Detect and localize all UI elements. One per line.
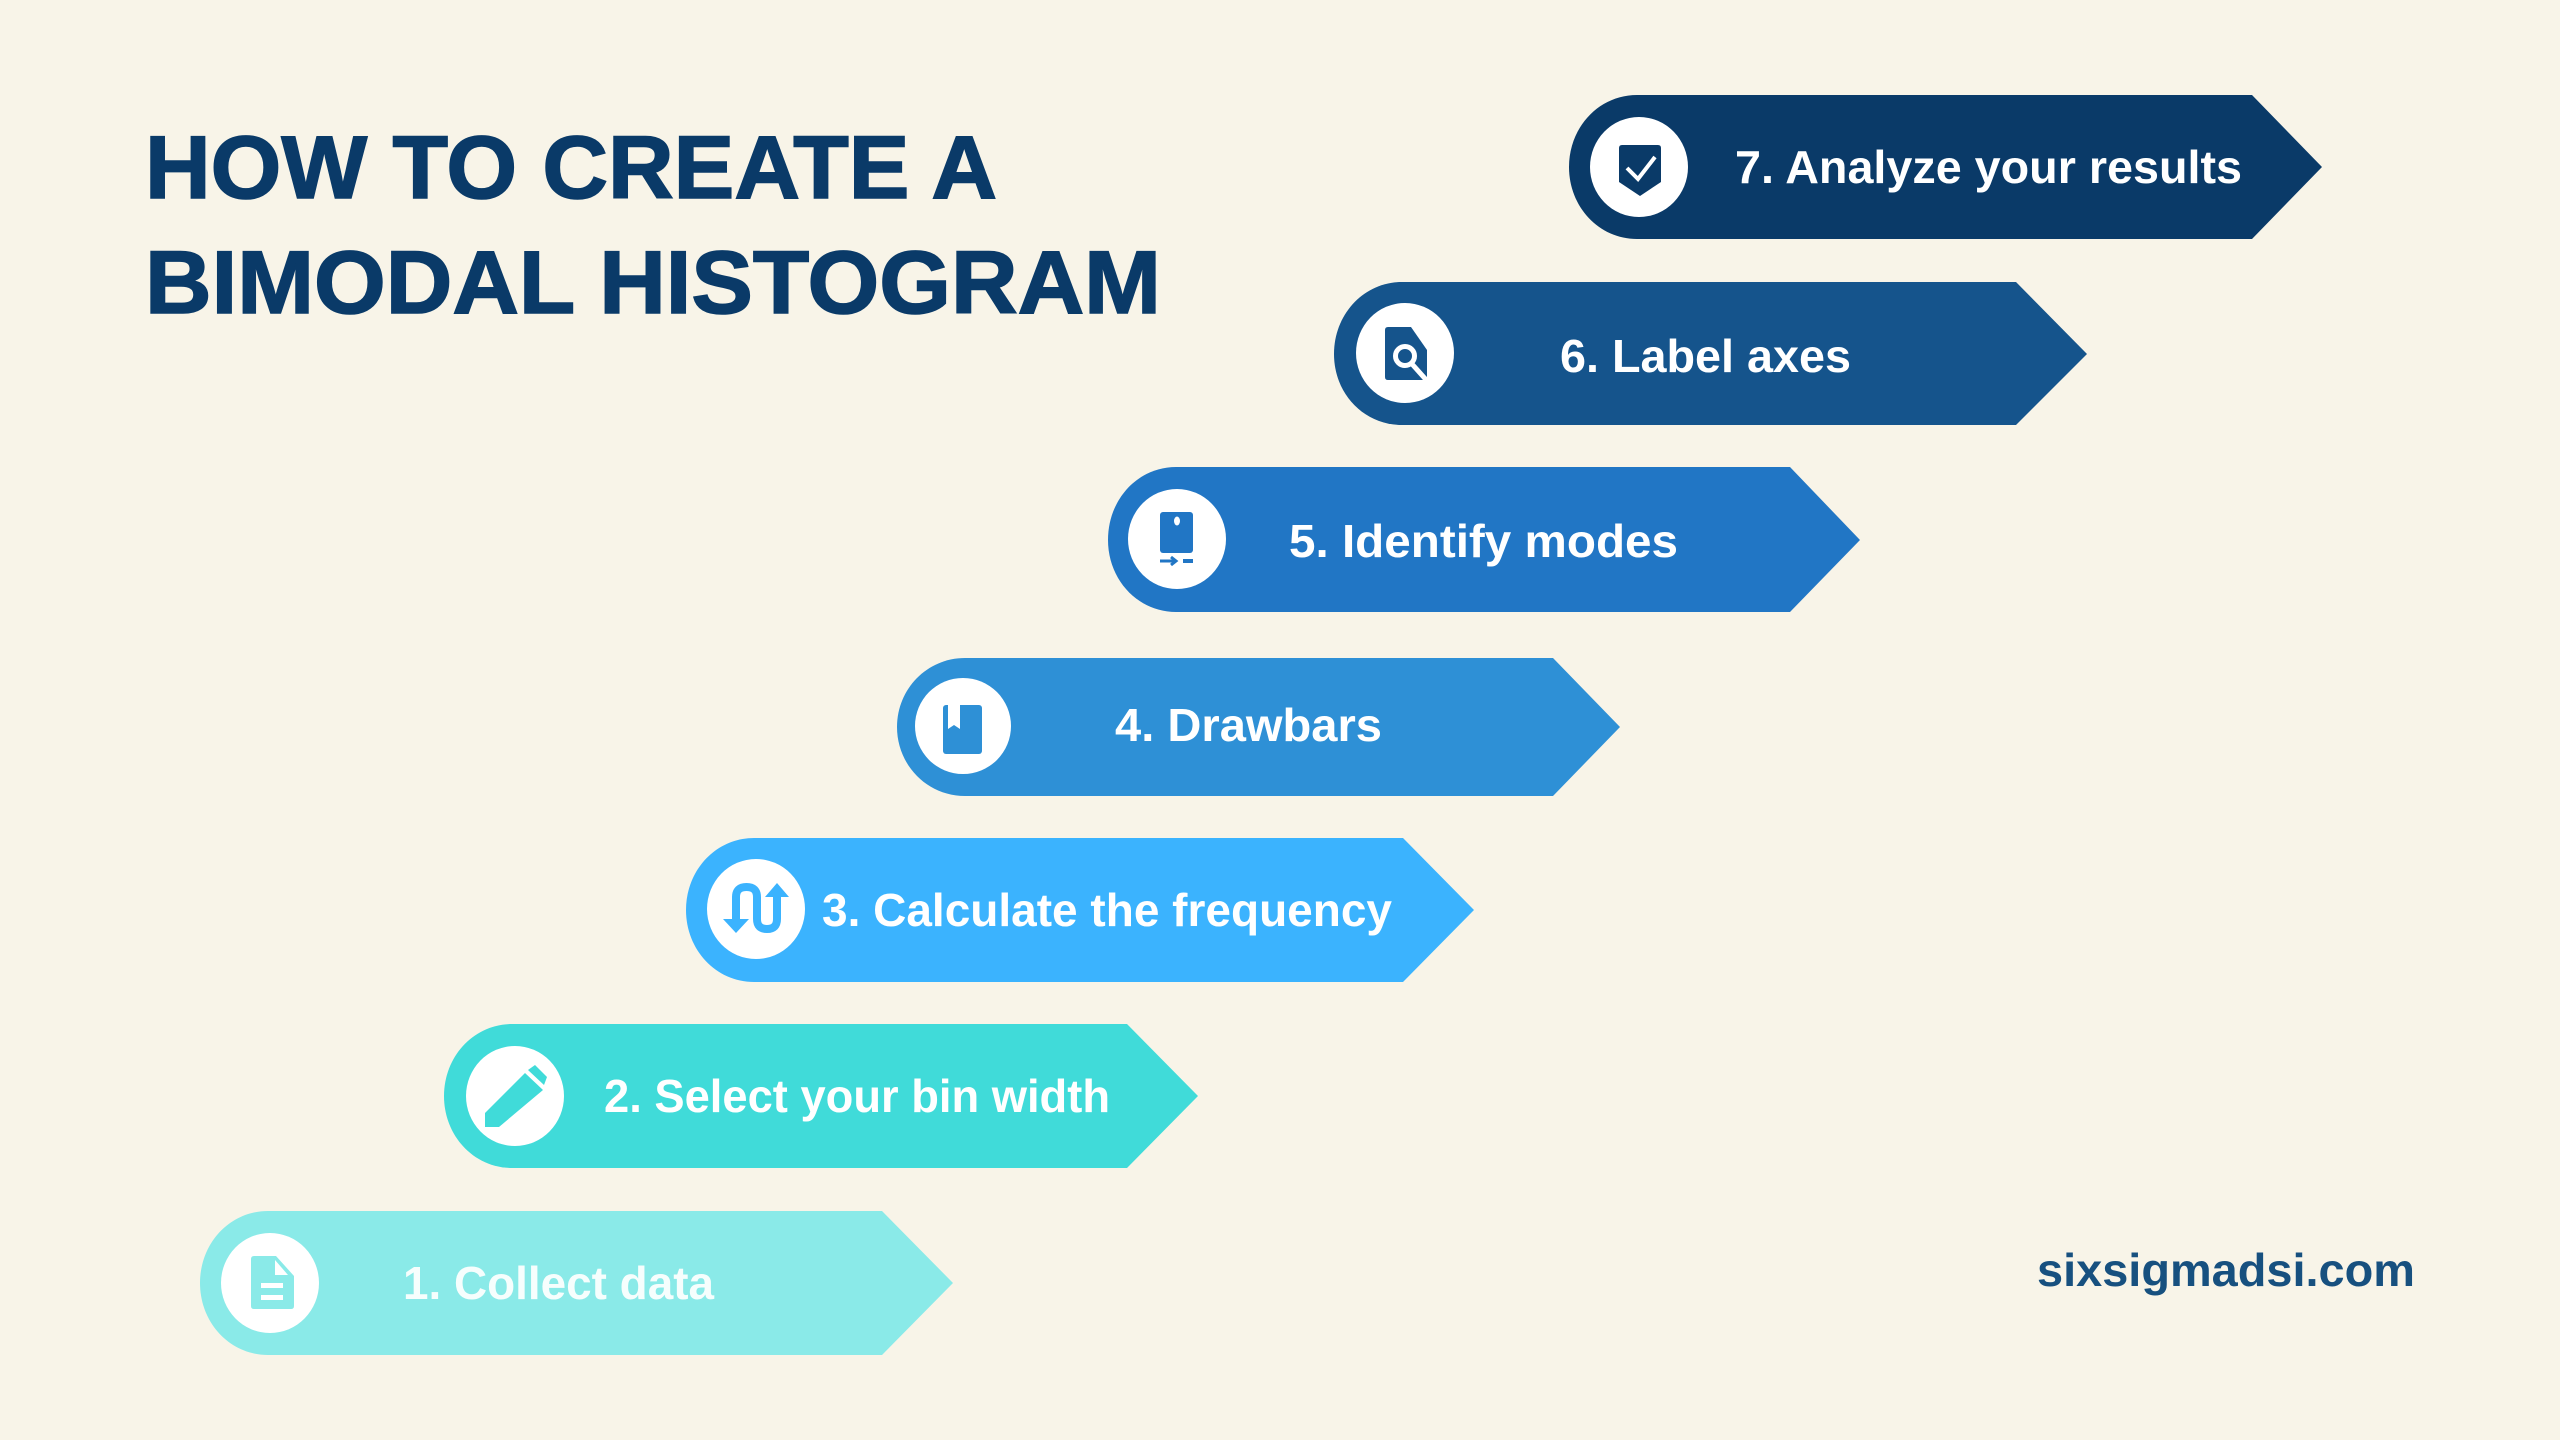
step 6: label axes — [1334, 282, 2087, 425]
arrow banner 1 — [200, 1211, 953, 1355]
label 4: 4. Drawbars — [1115, 699, 1382, 751]
label 1: 1. Collect data — [403, 1257, 714, 1309]
icon: document — [221, 1233, 319, 1333]
step 7: analyze your results — [1569, 95, 2322, 239]
step 4: drawbars — [897, 658, 1620, 796]
step 2: select your bin width — [444, 1024, 1198, 1168]
icon: phone with arrow — [1128, 489, 1226, 589]
arrow banner 4 — [897, 658, 1620, 796]
website footer: sixsigmadsi.com — [2037, 1244, 2415, 1296]
title — [145, 117, 1161, 332]
icon: serpentine up and down arrows — [707, 859, 805, 959]
arrow banner 5 — [1108, 467, 1860, 612]
label 5: 5. Identify modes — [1289, 515, 1678, 567]
icon: shield check — [1590, 117, 1688, 217]
label 6: 6. Label axes — [1560, 330, 1851, 382]
step 5: identify modes — [1108, 467, 1860, 612]
icon: document with magnifier — [1356, 303, 1454, 403]
title: HOW TO CREATE A — [145, 117, 997, 217]
step 3: calculate the frequency — [686, 838, 1474, 982]
arrow banner 7 — [1569, 95, 2322, 239]
icon: bookmarked book — [915, 678, 1011, 774]
label 2: 2. Select your bin width — [604, 1070, 1110, 1122]
title: BIMODAL HISTOGRAM — [145, 232, 1161, 332]
arrow banner 3 — [686, 838, 1474, 982]
arrow banner 6 — [1334, 282, 2087, 425]
label 3: 3. Calculate the frequency — [822, 884, 1392, 936]
arrow banner 2 — [444, 1024, 1198, 1168]
step 1: collect data — [200, 1211, 953, 1355]
icon: pencil — [466, 1046, 564, 1146]
label 7: 7. Analyze your results — [1735, 141, 2242, 193]
